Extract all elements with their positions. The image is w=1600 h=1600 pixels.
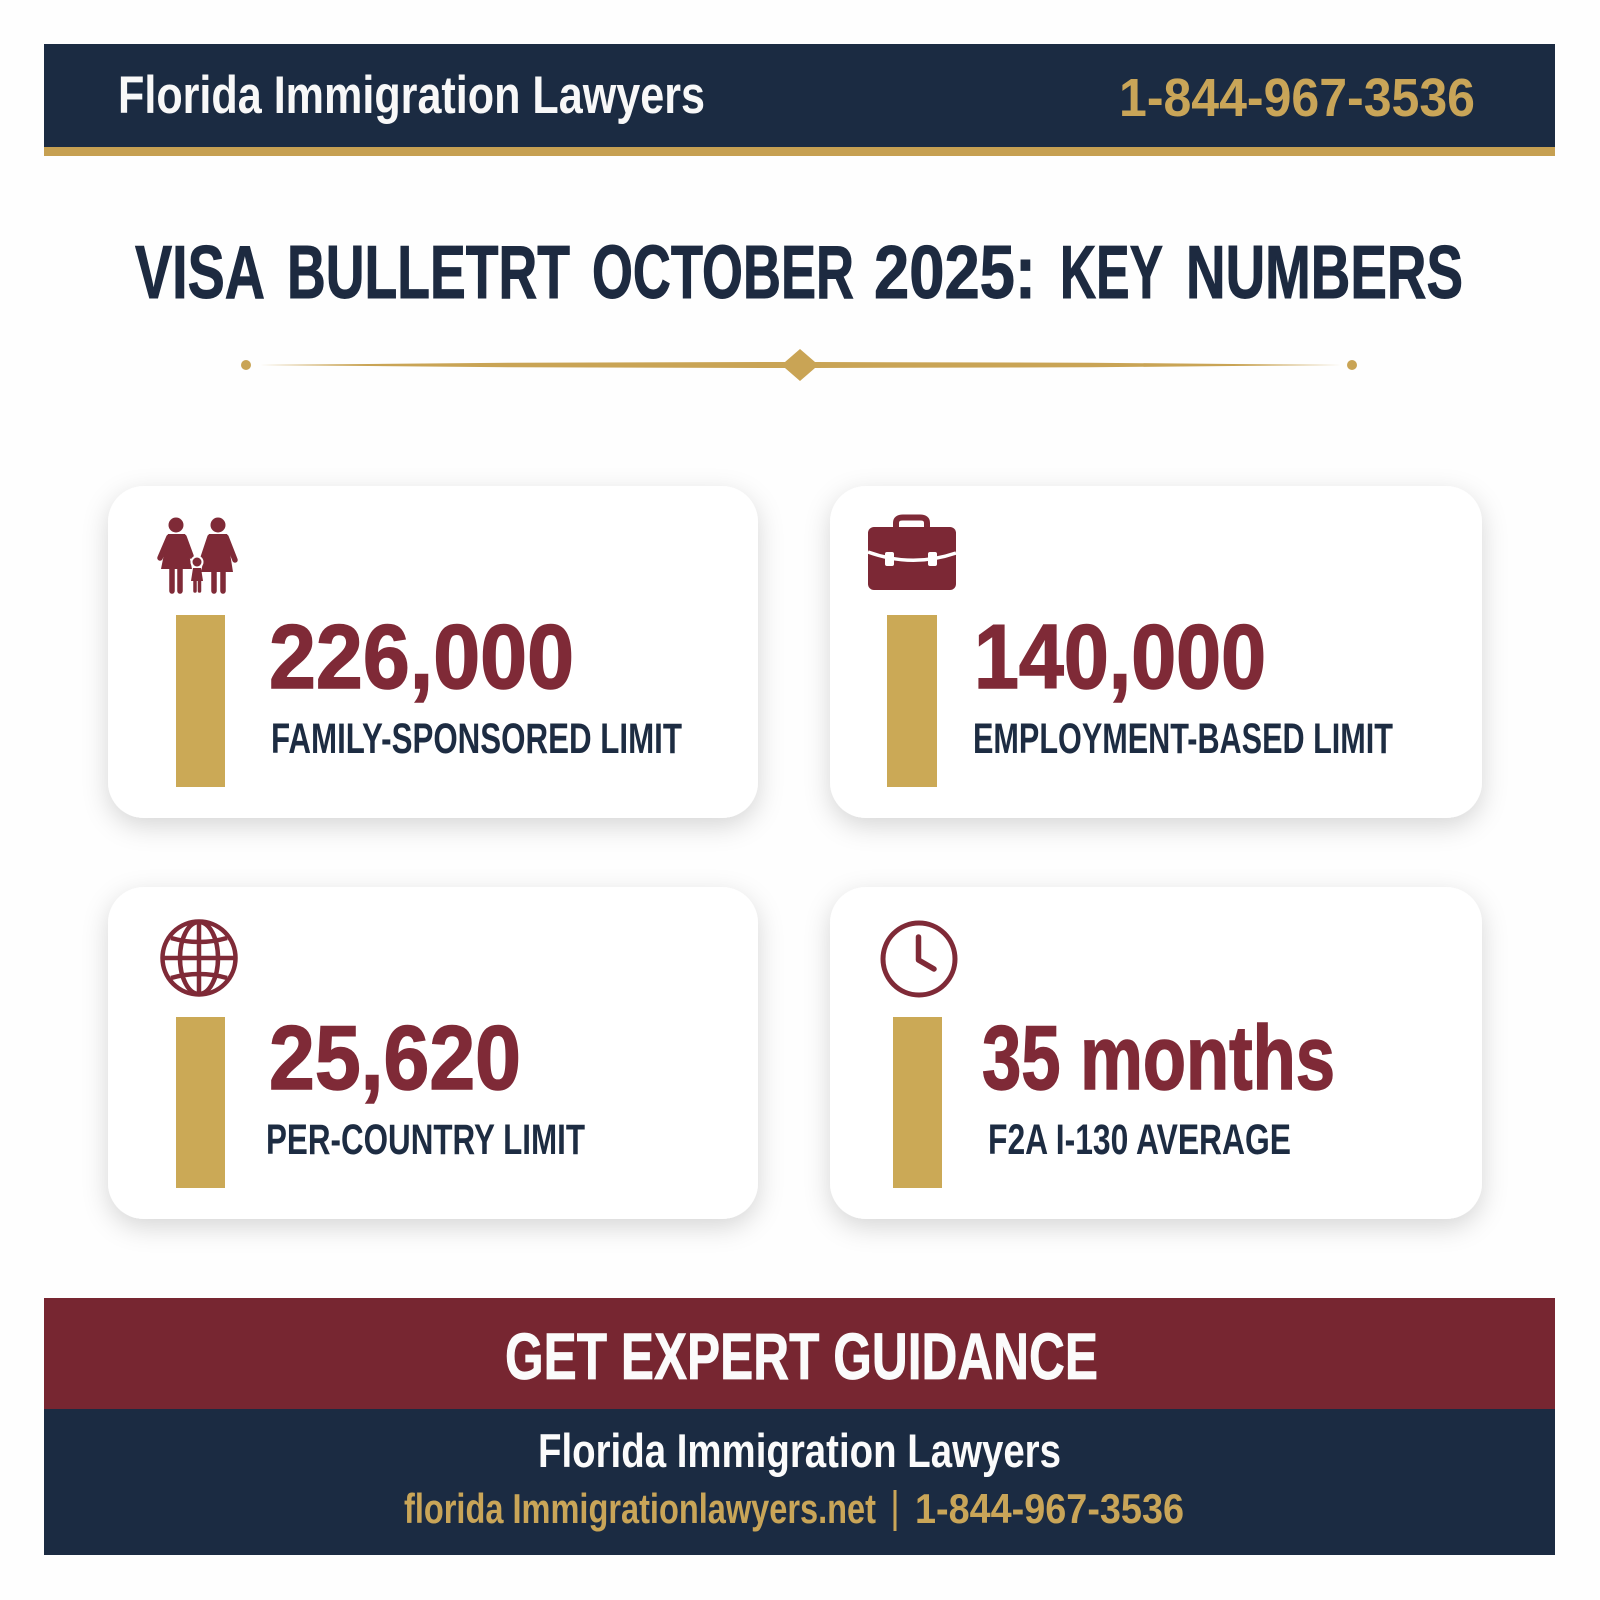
icon: family — [160, 518, 235, 591]
panel: per-country limit — [108, 887, 758, 1219]
firm name: Florida Immigration Lawyers — [118, 66, 705, 125]
value: 226,000 — [269, 607, 574, 708]
title: BULLETRT — [287, 230, 570, 314]
panel: family-sponsored limit — [108, 486, 758, 818]
icon: briefcase — [868, 518, 956, 590]
call to action text: GET EXPERT GUIDANCE — [505, 1319, 1098, 1393]
label: EMPLOYMENT-BASED LIMIT — [973, 715, 1393, 763]
icon: clock — [883, 923, 955, 995]
title — [135, 230, 1463, 314]
header banner — [44, 44, 1555, 156]
gold bar — [176, 615, 225, 787]
value: 25,620 — [269, 1008, 521, 1109]
label: F2A I-130 AVERAGE — [988, 1116, 1291, 1164]
gold bar — [887, 615, 937, 787]
title: VISA — [135, 230, 265, 314]
label: PER-COUNTRY LIMIT — [266, 1116, 585, 1164]
panel: employment-based limit — [830, 486, 1482, 818]
title: OCTOBER — [592, 230, 854, 314]
icon: globe — [162, 922, 236, 994]
title: NUMBERS — [1186, 230, 1463, 314]
divider ornament — [241, 349, 1357, 381]
panel: F2A I-130 average — [830, 887, 1482, 1219]
footer website: florida Immigrationlawyers.net — [404, 1485, 876, 1532]
gold bar — [176, 1017, 225, 1188]
separator — [894, 1490, 896, 1531]
call to action banner — [44, 1298, 1555, 1409]
phone number: 1-844-967-3536 — [1119, 68, 1475, 128]
title: KEY — [1060, 230, 1163, 314]
title: 2025: — [874, 230, 1036, 314]
label: FAMILY-SPONSORED LIMIT — [271, 715, 682, 763]
value: 35 months — [982, 1008, 1335, 1109]
footer phone: 1-844-967-3536 — [915, 1485, 1184, 1532]
footer banner — [44, 1409, 1555, 1555]
gold bar — [893, 1017, 942, 1188]
value: 140,000 — [974, 607, 1266, 708]
footer firm name: Florida Immigration Lawyers — [538, 1424, 1061, 1477]
